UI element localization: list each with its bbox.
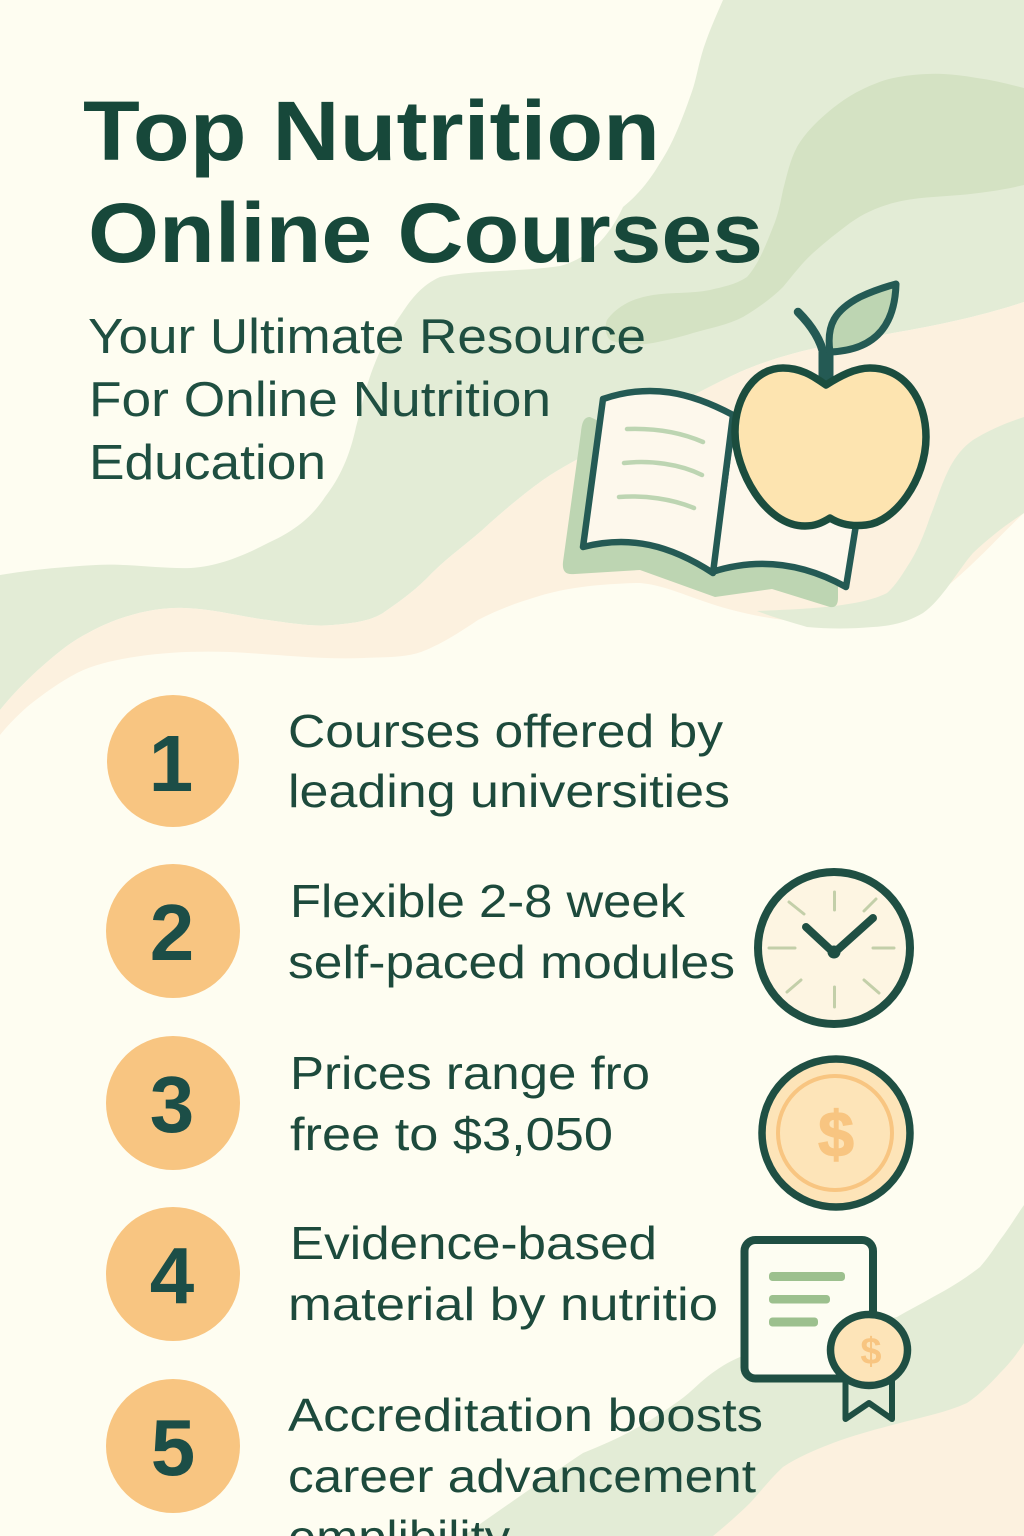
item 2 text: Flexible 2-8 week [290,875,686,927]
icon: dollar coin [762,1059,910,1207]
icon: clock [758,872,910,1024]
book shadow [563,417,838,607]
ribbon [846,1380,892,1419]
subtitle: Your Ultimate Resource [88,310,646,364]
item 4 text [288,1217,718,1330]
icon: certificate with seal [744,1240,908,1419]
number badge 2: 2 [150,888,194,977]
item 2 text [288,875,735,988]
number badge 5 [106,1379,240,1513]
number badge 1: 1 [149,719,193,808]
item 4 text: material by nutritio [288,1278,718,1330]
number badge 1 [107,695,239,827]
subtitle: Education [89,436,326,490]
item 1 text: Courses offered by [288,705,723,757]
list item 2 [106,864,735,998]
item 4 text: Evidence-based [290,1217,657,1269]
list item 3 [106,1036,650,1170]
number badge 2 [106,864,240,998]
book pages [583,391,860,587]
apple stem and leaf [798,284,896,384]
item 3 text [290,1047,650,1160]
title: Top Nutrition [83,84,660,178]
icon: open book and apple [563,284,926,607]
item 5 text [288,1389,763,1536]
item 1 text: leading universities [288,765,730,817]
seal [830,1314,908,1386]
item 2 text: self-paced modules [288,936,735,988]
certificate lines [769,1272,845,1326]
item 5 text: Accreditation boosts [288,1389,763,1441]
list item 4 [106,1207,718,1341]
seal: $ [860,1331,882,1373]
list item 1 [107,695,730,827]
item 3 text: free to $3,050 [290,1108,613,1160]
number badge 5: 5 [151,1403,195,1492]
item 3 text: Prices range fro [290,1047,650,1099]
certificate sheet [744,1240,873,1378]
title [83,84,763,280]
list item 5 [106,1379,763,1536]
title: Online Courses [88,186,763,280]
number badge 4: 4 [150,1231,195,1320]
number badge 3 [106,1036,240,1170]
icon: dollar coin: $ [818,1098,854,1170]
item 5 text: career advancement [288,1450,756,1502]
subtitle: For Online Nutrition [89,373,551,427]
apple body [735,368,926,526]
item 1 text [288,705,730,817]
number badge 3: 3 [150,1060,194,1149]
number badge 4 [106,1207,240,1341]
subtitle [88,310,646,490]
book text lines [619,429,703,508]
